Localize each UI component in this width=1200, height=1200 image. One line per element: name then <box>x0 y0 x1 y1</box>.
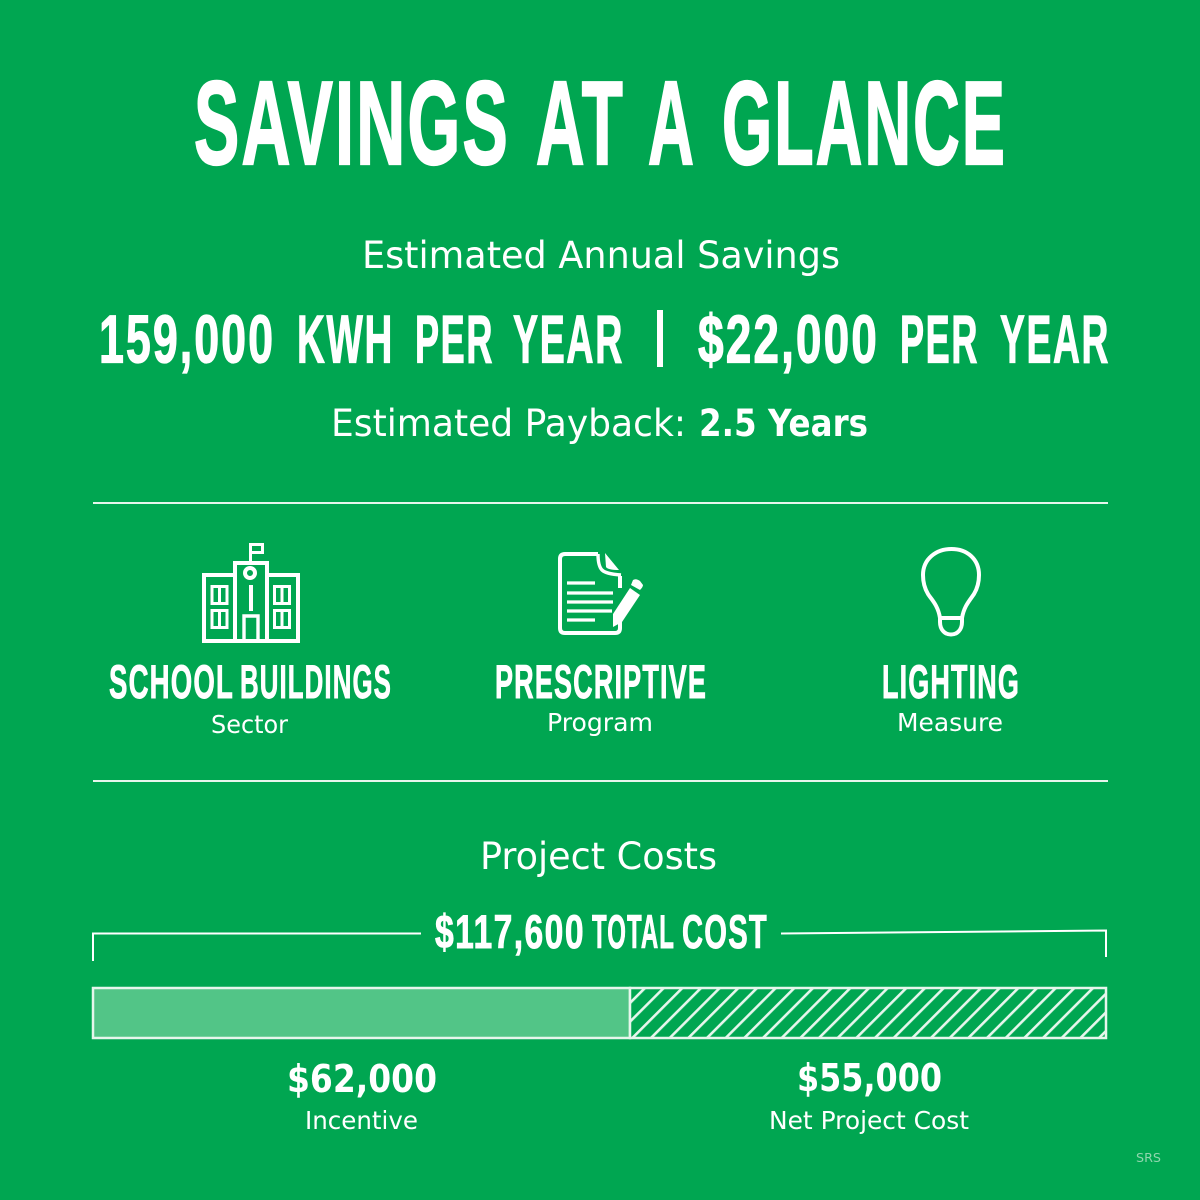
icon: document with pencil <box>560 553 643 633</box>
savings subheading: Estimated Annual Savings <box>362 234 840 277</box>
payback <box>331 402 868 445</box>
title: SAVINGS <box>194 57 510 190</box>
savings figures: $22,000 <box>698 302 879 378</box>
panel: sector <box>109 544 392 739</box>
title: A <box>648 57 696 190</box>
savings figures: KWH <box>297 302 394 378</box>
total cost label <box>435 905 768 958</box>
total cost label: COST <box>682 905 768 958</box>
total cost label: $117,600 <box>435 905 585 958</box>
payback: Estimated Payback: <box>331 402 686 445</box>
net project cost segment <box>630 988 1106 1038</box>
sector value: BUILDINGS <box>240 655 392 708</box>
icon: school building <box>204 544 298 641</box>
project costs heading: Project Costs <box>480 835 717 878</box>
payback: 2.5 Years <box>699 402 868 445</box>
stacked cost bar <box>93 988 1106 1038</box>
incentive figures: $62,000 <box>287 1057 437 1101</box>
savings figures: 159,000 <box>99 302 275 378</box>
title <box>194 57 1007 190</box>
program value: PRESCRIPTIVE <box>495 655 707 708</box>
incentive figures <box>287 1057 437 1135</box>
savings figures: PER <box>415 302 494 378</box>
total cost label: TOTAL <box>592 905 675 958</box>
incentive figures: Incentive <box>305 1106 418 1135</box>
measure label: Measure <box>897 708 1003 737</box>
net cost figures: $55,000 <box>797 1056 942 1100</box>
panel: program <box>495 553 707 737</box>
panel: measure <box>882 549 1020 737</box>
total cost bracket <box>93 930 1106 961</box>
savings figures: YEAR <box>1000 302 1110 378</box>
net cost figures <box>769 1056 969 1135</box>
program label: Program <box>547 708 653 737</box>
savings figures <box>99 302 1110 378</box>
credit: SRS <box>1136 1151 1161 1165</box>
title: AT <box>536 57 625 190</box>
incentive segment <box>93 988 630 1038</box>
sector value: SCHOOL <box>109 655 234 708</box>
measure value: LIGHTING <box>882 655 1020 708</box>
savings figures: YEAR <box>513 302 624 378</box>
net cost figures: Net Project Cost <box>769 1106 969 1135</box>
icon: light bulb <box>923 549 979 634</box>
sector label: Sector <box>211 710 289 739</box>
savings figures: PER <box>900 302 979 378</box>
